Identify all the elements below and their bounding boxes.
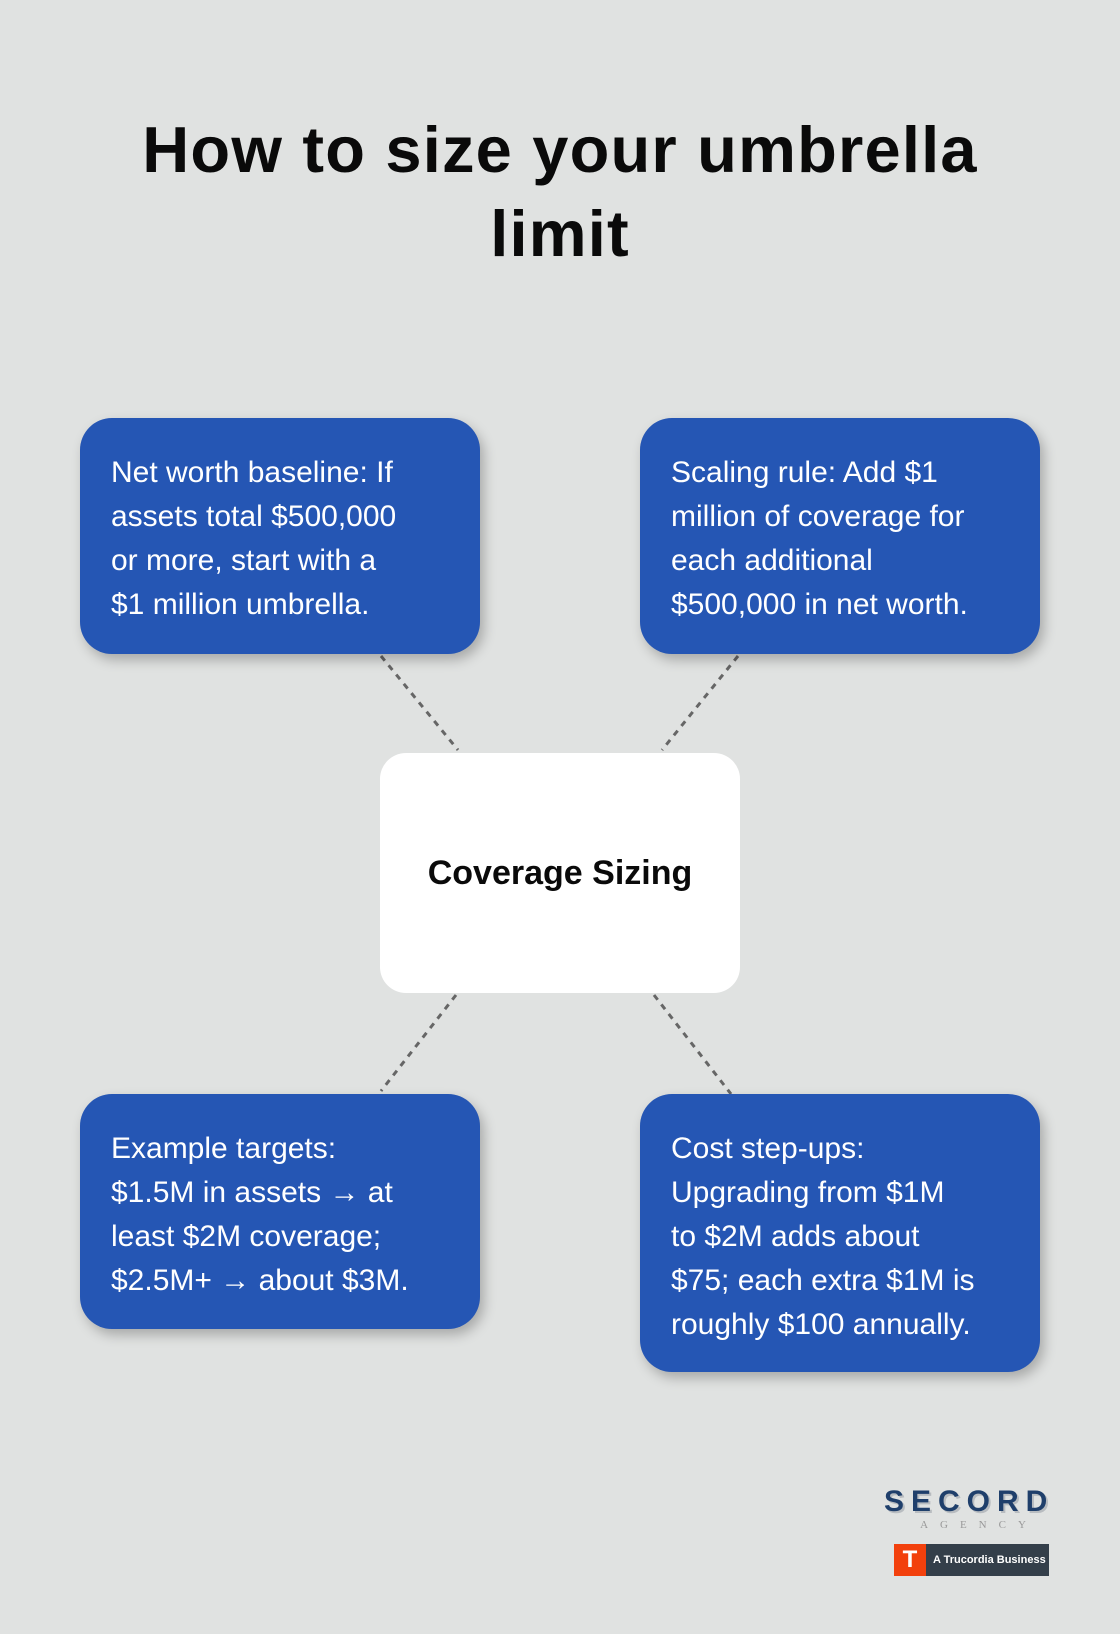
title: limit <box>490 197 630 270</box>
panel: cost step-ups <box>640 1094 1040 1372</box>
center node: Coverage Sizing <box>428 854 692 892</box>
panel: example targets: Example targets: <box>111 1132 336 1165</box>
center node <box>380 753 740 993</box>
panel: net worth baseline: assets total $500,000 <box>111 500 396 533</box>
panel: cost step-ups: $75; each extra $1M is <box>671 1264 975 1297</box>
logo: SECORD <box>884 1485 1054 1518</box>
panel: scaling rule: each additional <box>671 544 873 577</box>
panel: net worth baseline <box>80 418 480 654</box>
panel: scaling rule: million of coverage for <box>671 500 964 533</box>
panel: scaling rule: Scaling rule: Add $1 <box>671 456 938 489</box>
panel: net worth baseline: $1 million umbrella. <box>111 588 369 621</box>
logo: AGENCY <box>920 1519 1038 1531</box>
logo: T <box>903 1546 917 1573</box>
panel: net worth baseline: or more, start with a <box>111 544 376 577</box>
panel: example targets <box>80 1094 480 1329</box>
logo <box>884 1485 1054 1576</box>
panel: cost step-ups: Cost step-ups: <box>671 1132 864 1165</box>
panel: example targets: $2.5M+ → about $3M. <box>111 1264 409 1297</box>
title: How to size your umbrella <box>142 113 978 186</box>
logo: A Trucordia Business <box>933 1554 1046 1566</box>
title <box>142 113 978 270</box>
panel: scaling rule: $500,000 in net worth. <box>671 588 968 621</box>
panel: example targets: $1.5M in assets → at <box>111 1176 393 1209</box>
panel: scaling rule <box>640 418 1040 654</box>
panel: example targets: least $2M coverage; <box>111 1220 381 1253</box>
panel: cost step-ups: to $2M adds about <box>671 1220 920 1253</box>
panel: cost step-ups: Upgrading from $1M <box>671 1176 944 1209</box>
panel: cost step-ups: roughly $100 annually. <box>671 1308 971 1341</box>
panel: net worth baseline: Net worth baseline: If <box>111 456 393 489</box>
